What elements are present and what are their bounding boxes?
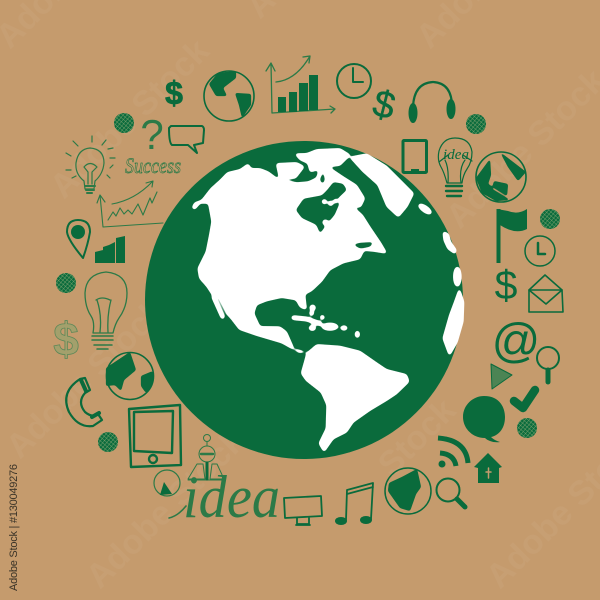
icon: small bar chart (95, 236, 125, 263)
watermark: Adobe (196, 170, 299, 270)
icon: hatched dot (114, 113, 134, 133)
icon: clock top (337, 64, 371, 98)
north and central america (192, 163, 387, 353)
icon: hatched dot (540, 209, 560, 229)
europe edge (443, 231, 457, 254)
icon: hatched dot (56, 273, 76, 293)
arctic islands (276, 162, 305, 179)
icon: telephone (66, 378, 102, 426)
icon: rising bar chart (266, 56, 335, 113)
africa edge (443, 288, 464, 356)
icon: faded dollar: $ (53, 313, 79, 365)
icon: light bulb with rays (66, 136, 115, 193)
watermark: Adobe Stock (43, 32, 217, 206)
hudson bay islands (322, 199, 338, 225)
icon: idea bulb: idea (443, 147, 469, 163)
caribbean islands (293, 305, 360, 338)
icon: speech bubble (169, 126, 204, 153)
icon: magnifier bottom (436, 478, 465, 507)
greenland (349, 154, 414, 217)
icon: globe bottom (385, 468, 431, 514)
icon: slanted dollar: $ (369, 82, 399, 128)
surrounding icons (53, 56, 563, 530)
icon: globe right (476, 152, 526, 202)
icon: hatched dot (517, 418, 537, 438)
icon: at sign: @ (492, 315, 540, 368)
icon: big light bulb (85, 272, 127, 349)
icon: map pin (67, 220, 90, 258)
icon: globe left (106, 352, 154, 400)
icon: flag (496, 209, 527, 263)
icon: tablet top right (403, 140, 426, 172)
icon: headphones (408, 82, 456, 123)
icon: question mark: ? (140, 111, 164, 158)
icon: person with thought (188, 434, 224, 480)
icon: filled speech bubble (463, 396, 505, 442)
icon: music note (335, 483, 373, 525)
icon: clock right (525, 236, 555, 266)
icon: tablet left (129, 405, 181, 467)
text: idea: idea (183, 464, 280, 530)
icon: triangle play (491, 364, 512, 389)
icon: globe top left (204, 71, 254, 121)
south america (301, 344, 409, 452)
icon: monitor (284, 496, 322, 525)
icon: idea bulb (438, 138, 472, 196)
icon: envelope (529, 275, 563, 312)
icon: check mark (514, 390, 535, 408)
watermark: Adobe Stock (0, 292, 173, 466)
watermark: Adobe Stock (79, 422, 253, 596)
watermark: Stock (371, 391, 463, 484)
icon: pie clock (154, 470, 180, 496)
globe (145, 141, 464, 459)
icon: wifi (438, 438, 468, 468)
baja california (214, 297, 223, 317)
iceland (417, 202, 433, 216)
arctic islands north (294, 148, 351, 172)
icon: hatched dot (98, 432, 118, 452)
watermark: Adobe (249, 322, 350, 424)
icon: magnifier right (537, 347, 559, 382)
watermark: Stock (322, 263, 418, 350)
icon: dollar right: $ (495, 262, 518, 308)
icon: bold dollar top: $ (165, 75, 183, 111)
icon: line chart (97, 181, 163, 227)
stock credit: Adobe Stock | #130049276 (8, 464, 20, 591)
icon: house (474, 453, 502, 483)
west africa bulge (453, 267, 461, 287)
text: Success: Success (125, 153, 181, 178)
icon: hatched dot (466, 114, 486, 134)
